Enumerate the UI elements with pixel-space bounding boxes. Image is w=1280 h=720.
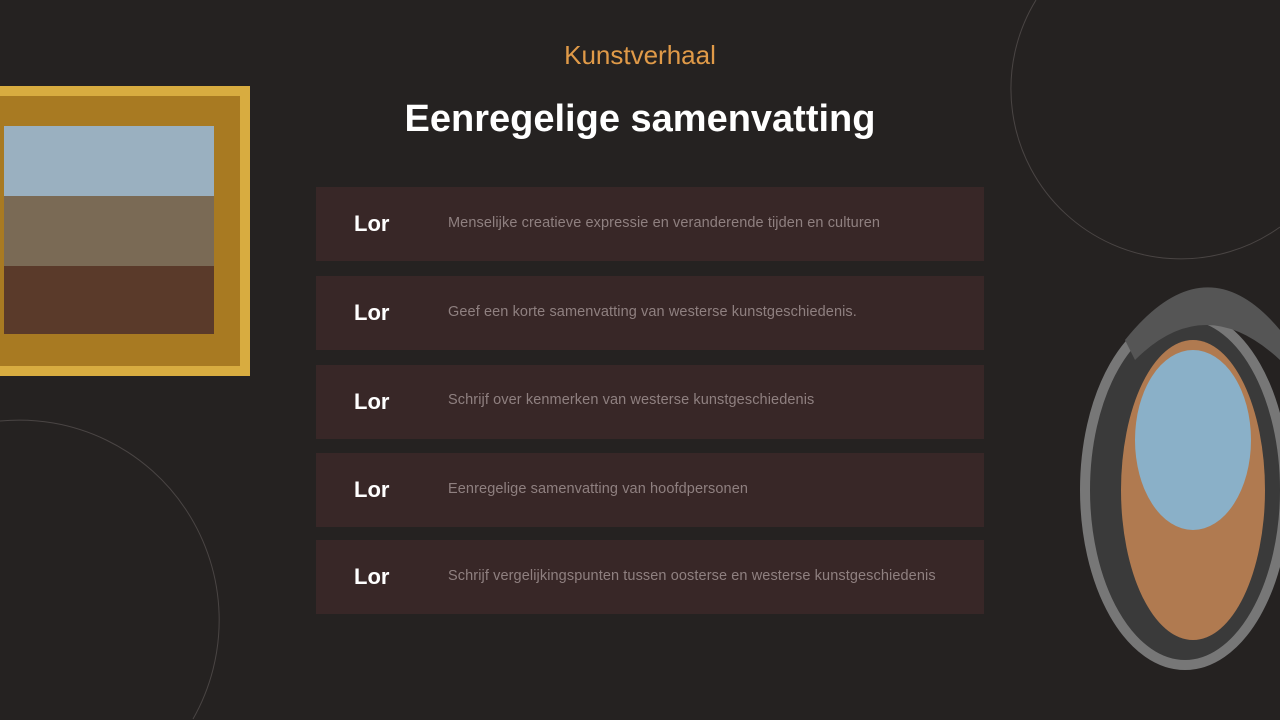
row 5: [316, 540, 984, 614]
row 2: [316, 276, 984, 350]
row 3: Lor: [354, 389, 389, 414]
row 1: [316, 187, 984, 261]
row 3: [316, 365, 984, 439]
row 5: Lor: [354, 564, 389, 589]
row 4: Lor: [354, 477, 389, 502]
title: Kunstverhaal: [564, 40, 716, 70]
row 3: Schrijf over kenmerken van westerse kunstgeschiedenis: [448, 392, 814, 408]
row 4: [316, 453, 984, 527]
row 4: Eenregelige samenvatting van hoofdpersonen: [448, 481, 748, 497]
painting: gold frame: [0, 86, 250, 376]
row 1: Menselijke creatieve expressie en veranderende tijden en culturen: [448, 215, 880, 231]
row 1: Lor: [354, 211, 389, 236]
heading: Eenregelige samenvatting: [405, 98, 875, 140]
row 5: Schrijf vergelijkingspunten tussen oosterse en westerse kunstgeschiedenis: [448, 568, 936, 584]
row 2: Geef een korte samenvatting van westerse kunstgeschiedenis.: [448, 304, 857, 320]
row 2: Lor: [354, 300, 389, 325]
painting: oval silver frame: [1080, 287, 1280, 670]
